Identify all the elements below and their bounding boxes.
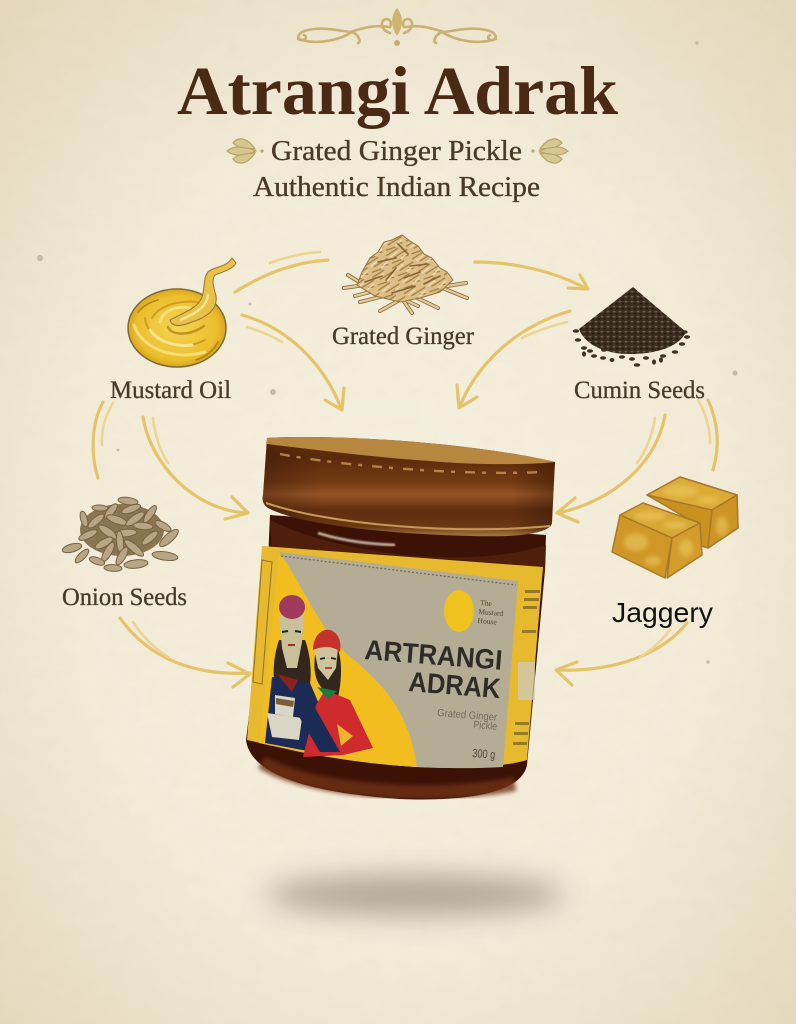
label: cumin seeds: Cumin Seeds xyxy=(574,377,705,404)
left figure sleeve xyxy=(298,690,340,752)
jar contents speckle band xyxy=(262,520,546,792)
woman: left figure xyxy=(265,595,340,753)
icon: mustard oil xyxy=(128,258,236,367)
arrow: mustard oil to grated ginger xyxy=(235,252,328,292)
arrow: mustard oil to jar xyxy=(242,315,344,410)
icon: cumin seeds xyxy=(573,287,690,367)
icon: jaggery cubes xyxy=(612,477,738,578)
yellow wrap label xyxy=(247,546,543,768)
brand circle xyxy=(444,590,474,632)
icon: grated ginger xyxy=(344,235,467,313)
grey front label xyxy=(259,552,518,768)
brand name: Mustard xyxy=(478,607,504,618)
arrow: mustard oil to onion seeds xyxy=(93,402,113,478)
subtitle line 1 with leaf ornaments: Grated Ginger Pickle xyxy=(271,135,522,167)
net weight: 300 g xyxy=(472,746,496,762)
label: grated ginger: Grated Ginger xyxy=(332,323,475,350)
icon: onion seeds xyxy=(61,496,181,572)
woman: right figure xyxy=(303,630,373,757)
label: mustard oil: Mustard Oil xyxy=(110,377,231,404)
jar body contents xyxy=(246,515,546,800)
subtitle line 2: Authentic Indian Recipe xyxy=(253,171,540,203)
arrow: onion seeds to jar xyxy=(120,618,250,687)
product name line 2: ADRAK xyxy=(408,666,502,704)
product name: ARTRANGI xyxy=(364,634,504,676)
arrow: cumin seeds to jaggery xyxy=(698,400,717,470)
arrow: mustard oil to jar lower xyxy=(143,417,248,519)
arrow: jaggery to jar xyxy=(556,623,687,685)
arrow: grated ginger to cumin seeds xyxy=(475,262,588,289)
side label info left xyxy=(253,560,272,684)
label: jaggery: Jaggery xyxy=(612,597,713,628)
arrow: cumin seeds to jar xyxy=(457,311,570,408)
title: Atrangi Adrak xyxy=(177,53,619,129)
product jar xyxy=(246,437,555,800)
label: onion seeds: Onion Seeds xyxy=(62,584,187,611)
side label info right xyxy=(513,590,540,745)
brand name: House xyxy=(477,616,498,627)
label dashed border xyxy=(281,556,516,585)
product descriptor: Grated Ginger xyxy=(437,707,498,724)
yellow swoosh xyxy=(259,552,417,767)
lid xyxy=(263,437,555,536)
jar shadow xyxy=(265,875,565,915)
brand name: The xyxy=(480,598,493,608)
arrow: cumin seeds to jar lower xyxy=(557,415,665,522)
top ornament xyxy=(298,8,496,46)
product descriptor line 2: Pickle xyxy=(473,719,498,733)
